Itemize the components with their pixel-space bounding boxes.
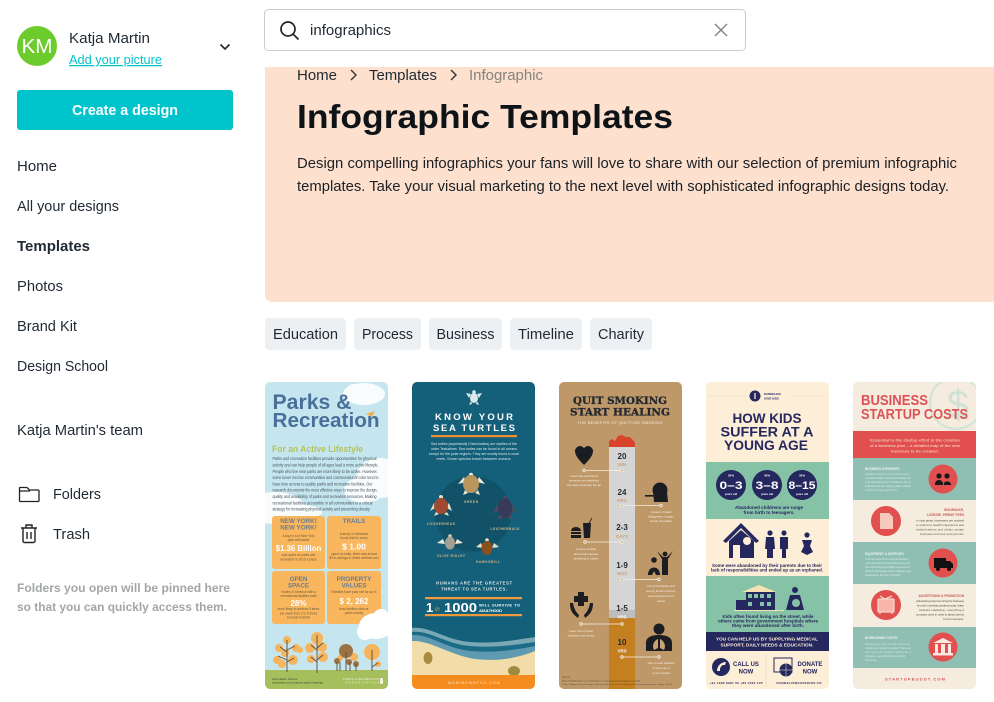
call us: +91 1008 8987 00 +89 1000 105 [710, 681, 763, 685]
section: borrowing: requires an infusion of capital. There are [865, 646, 911, 650]
folders label: Folders [53, 487, 101, 503]
logo [708, 390, 827, 402]
chip: business: Business [436, 327, 494, 343]
orphan caption: Some were abandoned by their parents due to their [712, 563, 822, 568]
green band: age groups: 8–15 [788, 480, 816, 492]
chip: education: Education [273, 327, 338, 343]
template card: quit smoking: HRS [617, 498, 627, 503]
section: business expenses: services, finance and more. [865, 488, 898, 492]
title [274, 394, 378, 427]
template card: quit smoking: YRS [617, 648, 627, 654]
icon: search [281, 22, 298, 40]
logo: DANDELION [764, 392, 781, 396]
statistic: 1 in 1000: WILL SURVIVE TO [479, 602, 520, 608]
icon: burger and drink [571, 518, 592, 538]
step captions: easier [657, 599, 665, 603]
title: START HEALING [570, 406, 670, 418]
timeline values: 10 [618, 638, 627, 647]
body copy [272, 456, 379, 512]
step captions: exercising becomes [648, 594, 675, 598]
template card: how kids suffer [706, 382, 829, 689]
icon: exercising figures [648, 551, 673, 575]
chip: business [429, 318, 502, 350]
add picture link: Add your picture [69, 53, 162, 67]
breadcrumb: Templates [369, 68, 437, 84]
chip: charity [590, 318, 652, 350]
hero description [297, 156, 957, 195]
timeline values: 24 [618, 488, 627, 497]
section: business expenses: competitors deliver a level of knowledge and [865, 476, 911, 480]
icon: bank [933, 638, 953, 656]
green band: age groups: 3–8 [756, 480, 778, 492]
section: equipment [853, 542, 976, 584]
threat statement: HUMANS ARE THE GREATEST [436, 580, 512, 586]
title: KNOW YOUR [435, 412, 513, 423]
icon: trash [21, 525, 37, 542]
green band: age groups: Abandoned childrens are range [735, 505, 804, 510]
chip: timeline [510, 318, 582, 350]
intro text [429, 442, 519, 461]
footer bar [412, 675, 535, 689]
threat statement: THREAT TO SEA TURTLES. [441, 586, 507, 592]
section: equipment: none of the equipment and listed resources [865, 561, 911, 565]
title [720, 410, 814, 453]
green band: age groups: 35% [799, 474, 805, 478]
step captions: blood circulation and [647, 584, 675, 588]
title: STARTUP COSTS [861, 406, 968, 423]
donate: DONATE [798, 662, 822, 668]
waves and beach [412, 628, 535, 675]
stat boxes: PROPERTY [337, 576, 372, 583]
turtle labels: OLIVE RIDLEY [437, 554, 466, 558]
title: Parks & [272, 391, 352, 414]
timeline values: 1-9 [616, 561, 628, 570]
subtitle: For an Active Lifestyle [272, 444, 363, 454]
section: borrowing: business; equity financing and debt [865, 654, 905, 658]
donate: DANDELIONSAVEKIDS.CO [776, 681, 822, 685]
sources: http://medlicker.com/1013/quit-smoking-what-happens-body [562, 680, 641, 682]
stat boxes: $ 2, 262 [340, 597, 369, 606]
body copy: strategy for increasing physical activity and preventing obesity. [272, 506, 371, 512]
search query: infographics [310, 23, 391, 39]
dollar watermark: $ [947, 383, 969, 427]
call us: NOW [739, 670, 754, 676]
icon: house [723, 523, 759, 558]
step captions: disappears, oxygen [648, 514, 674, 518]
chip: process [354, 318, 421, 350]
hero banner [265, 67, 994, 302]
stat boxes: $1.36 Billion [276, 544, 321, 553]
intro band [853, 431, 976, 458]
dark circle [435, 476, 511, 552]
turtle labels: GREEN [464, 500, 479, 504]
stat boxes: a breast function [287, 616, 311, 620]
navigation menu: Brand Kit [17, 319, 77, 335]
stat boxes: TRAILS [343, 518, 365, 525]
step captions: a non-smoker [652, 671, 670, 675]
title: SUFFER AT A [720, 424, 814, 440]
stat boxes: $3 in savings in direct medical cost [329, 556, 379, 560]
step captions: pressure are stabilized [569, 478, 599, 482]
section: advertising: company does in order to attract clients [916, 612, 964, 616]
stat boxes: was spent on parks and [282, 553, 316, 557]
call us [710, 658, 763, 685]
turtle labels: HAWKSBILL [476, 560, 500, 564]
section: insurance [871, 506, 964, 536]
green band: street kids: others came from government hospitals where [718, 618, 819, 624]
statistic: 1 in 1000 [425, 597, 522, 616]
body copy: recreational facilities accessible in all communities is a critical [272, 500, 373, 506]
step captions: levels normalize [650, 519, 672, 523]
statistic: 1 in 1000: 1 [426, 600, 433, 615]
step captions: diseases and stroke [568, 634, 595, 638]
hero description: Design compelling infographics your fans will love to share with our selection of premium infographic [297, 156, 957, 172]
sources [562, 676, 673, 686]
threat statement [436, 582, 512, 590]
step captions: heart rate and blood [571, 474, 598, 478]
section: business expenses: hold off realizing any of initiatives. Some [865, 480, 911, 484]
statistic: 1 in 1000: ADULTHOOD [479, 608, 502, 613]
donate: NOW [803, 670, 818, 676]
step captions: risk of heart disease [648, 661, 675, 665]
navy call-to-action band: SUPPORT, DAILY NEEDS & EDUCATION. [720, 642, 814, 648]
footer [272, 678, 323, 684]
icon: people [935, 473, 951, 485]
section: business expenses: industries indicate, paying utilities, staffing [865, 484, 911, 488]
footer url: STARTUPBUDDY.COM [885, 676, 946, 682]
section: insurance: LICENSE, PERMIT FEES [927, 513, 964, 517]
user avatar [17, 26, 57, 66]
section: business expenses [853, 458, 976, 500]
folders help text: Folders you open will be pinned here [17, 581, 230, 595]
stat boxes: parks nearby [345, 611, 364, 615]
turtle labels: LOGGERHEAD [427, 522, 456, 526]
green band: age groups: 50% [728, 474, 734, 478]
section: equipment: that will adding appropriate expenses or [865, 565, 910, 569]
section: business expenses: BUSINESS EXPENSES [865, 467, 899, 471]
green band: street kids: they were abandoned after birth. [732, 623, 804, 628]
ground [265, 670, 388, 689]
template card: business startup costs [853, 377, 982, 689]
icon: turtle logo [466, 390, 482, 405]
connector lines [580, 469, 662, 658]
icon: building [734, 585, 784, 611]
step captions: energy levels improve, [646, 589, 676, 593]
turtle: leatherback [492, 496, 518, 520]
stat boxes [272, 516, 381, 624]
footer: www.pfanr.com/mayors-parks-strategy [272, 680, 324, 684]
folders help text [17, 581, 230, 614]
orange rule [431, 435, 517, 437]
turtle: loggerhead [430, 495, 452, 516]
stat boxes: per week than 1 to 5 times [280, 612, 318, 616]
body copy: have less access to quality parks and recreation facilities. Our [272, 482, 373, 486]
step captions: breathing is easier [574, 556, 598, 560]
green band: age groups: years old [796, 492, 808, 496]
section: borrowing: financing. [865, 658, 877, 662]
statistic: 1 in 1000: in [435, 607, 440, 613]
section: advertising: ADVERTISING & PROMOTION [918, 594, 965, 598]
section: equipment: rental needs, furniture, or fixtures. [865, 573, 901, 577]
orphan caption [711, 563, 823, 572]
icon: folder [20, 488, 39, 502]
trees [273, 632, 381, 673]
navy call-to-action band [706, 632, 829, 651]
stat boxes: NEW YORK! [280, 518, 317, 525]
sources: Sources: [562, 676, 571, 678]
call us: CALL US [733, 662, 759, 668]
title: QUIT SMOKING [573, 395, 667, 407]
title [861, 392, 968, 423]
title: YOUNG AGE [724, 437, 808, 453]
beach turtles [424, 652, 432, 664]
timeline values: 1-5 [616, 604, 628, 613]
footer bar: MARINEWATCH.COM [448, 680, 500, 685]
stat boxes: A study in Nebraska [340, 532, 368, 536]
intro band: of a business plan – a detailed map of the new [870, 443, 960, 448]
section: borrowing [853, 627, 976, 668]
template card: quit smoking: MOS [617, 571, 627, 576]
timeline values: 20 [618, 452, 627, 461]
icon: chevron [220, 44, 230, 49]
navigation menu: Katja Martin's team [17, 423, 143, 439]
step captions: senses of taste [576, 547, 596, 551]
step captions: smoker's breath [650, 510, 672, 514]
footer: Information Source [272, 677, 298, 681]
navigation menu: Home [17, 159, 57, 175]
create a design button [17, 90, 233, 130]
section: insurance: to submit to health inspections and [916, 523, 964, 527]
intro text: except for the polar regions. They are mostly found in coral [429, 452, 519, 456]
sidebar [17, 26, 233, 614]
template card: quit smoking: YRS [617, 614, 627, 620]
section: advertising [871, 590, 965, 621]
cigarette ember [609, 435, 635, 447]
step captions: see step yesterday the air [567, 483, 601, 487]
template card: sea turtles [412, 382, 535, 689]
timeline values: 2-3 [616, 523, 628, 532]
navigation menu: Templates [17, 239, 90, 255]
clouds [265, 383, 388, 524]
section: borrowing: BORROWING COSTS [865, 636, 897, 640]
section: business expenses: Careful research of the industry and [865, 472, 909, 476]
body copy: quality and availability of parks and recreation resources. Making [272, 494, 377, 499]
section: insurance: business licenses and permits. [920, 532, 964, 536]
title: Recreation [272, 410, 380, 432]
section: equipment: Costs incurred for items should be listed [865, 557, 908, 561]
body copy: research documents the most effective ways to improve the design, [272, 488, 378, 492]
folders help text: so that you can quickly access them. [17, 600, 227, 614]
section: equipment: EQUIPMENT & SUPPLIES [865, 552, 904, 556]
search bar [264, 10, 746, 50]
user avatar: KM [22, 36, 52, 58]
template card: quit smoking: DAYS [616, 534, 628, 539]
section: advertising: includes marketing - everything a [919, 608, 964, 612]
chip: process: Process [362, 327, 413, 343]
statistic: 1 in 1000: 1000 [444, 600, 477, 615]
breadcrumb [297, 68, 543, 84]
stat boxes: spent on trails, there was almost [331, 552, 377, 556]
stat boxes: 28% [290, 599, 307, 608]
navigation menu [17, 159, 143, 439]
body copy: People who live near parks are more likely to be active. However, [272, 469, 378, 474]
section: insurance: In most areas, businesses are required [916, 518, 964, 522]
intro band: Essential to the startup effort is the creation [870, 438, 960, 442]
stat boxes: NEW YORK! [280, 524, 317, 532]
stat boxes: $ 1.00 [342, 542, 366, 552]
step captions: is same as of [652, 666, 670, 670]
section: advertising: Advertising and promoting the business [916, 599, 964, 603]
create a design button: Create a design [72, 103, 178, 119]
stat boxes: OPEN [290, 576, 308, 583]
icon: head with cigarette [645, 482, 668, 502]
navy call-to-action band: YOU CAN HELP US BY SUPPLYING MEDICAL [716, 636, 818, 642]
step captions: lower risk of heart [569, 629, 593, 633]
category chips [265, 318, 652, 350]
subtitle: THE BENEFITS OF QUITTING SMOKING [578, 420, 662, 425]
stat boxes: recreation in 2015 a place [280, 558, 317, 562]
breadcrumb: Home [297, 68, 337, 84]
turtle: olive ridley [437, 534, 463, 550]
template card: parks and recreation: PARKS & RECREATION [343, 677, 379, 681]
navigation menu: Photos [17, 279, 63, 295]
title: BUSINESS [861, 392, 928, 409]
stat boxes: found that for every [340, 536, 368, 540]
stat boxes: park enthusiast [288, 538, 309, 542]
green band: age groups: 0–3 [720, 480, 742, 492]
template card: parks and recreation: ORGANIZATION [345, 680, 379, 684]
user name: Katja Martin [69, 31, 150, 47]
cigarette timeline [609, 435, 635, 689]
orphan caption: lack of responsibilities and ended up as an orphaned. [711, 568, 823, 572]
green band: age groups: from birth to teenagers. [744, 510, 794, 515]
green band: age groups: years old [761, 492, 773, 496]
star [366, 411, 375, 417]
stat boxes: than families without [340, 607, 369, 611]
template card: quit smoking [559, 382, 682, 689]
icon: torso with lungs [646, 624, 672, 651]
title: SEA TURTLES [433, 423, 515, 434]
turtle: hawksbill [476, 538, 499, 555]
title: HOW KIDS [732, 410, 802, 426]
intro text: order Testudines. Sea turtles can be found in all oceans [431, 447, 517, 451]
icon: heart [575, 446, 593, 465]
stat boxes: more likely to achieve 5 times [278, 607, 320, 611]
icon: family [765, 530, 813, 558]
breadcrumb: Infographic [469, 68, 543, 84]
stat boxes: SPACE [288, 582, 309, 590]
title [570, 396, 670, 416]
turtle: green [458, 473, 485, 495]
chip: education [265, 318, 346, 350]
section: insurance: INSURANCE, [944, 508, 964, 512]
icon: cross and hands [570, 592, 593, 618]
icon: document [880, 513, 893, 529]
icon: person [786, 587, 804, 610]
timeline values [616, 452, 628, 647]
template card: parks and recreation [265, 382, 388, 689]
step captions [567, 474, 676, 675]
hero description: templates. Take your visual marketing to the next level with sophisticated infographic designs today. [297, 179, 949, 195]
section: advertising: to the business. [943, 617, 964, 621]
stat boxes: VALUES [341, 582, 367, 590]
body copy: Parks and recreation facilities provide opportunities for physical [272, 456, 377, 461]
section: insurance: authorizations and obtain certain [916, 528, 964, 532]
sources: http://www.livestrong.com/article/quit-smoking-effects-body-over-time-2013 [562, 683, 673, 686]
logo: SAVE KIDS [764, 396, 779, 400]
turtle labels [427, 500, 520, 564]
section: borrowing: Starting up one of the business [865, 642, 911, 646]
chip: charity: Charity [598, 327, 645, 343]
stat boxes: recreational facilities walk [280, 594, 317, 598]
turtle labels: LEATHERBACK [490, 527, 520, 531]
section: borrowing: two types of funded capital for a [865, 650, 911, 654]
step captions: and smell improve [574, 552, 599, 556]
section: equipment: interest costs, leasing, various software costs [865, 569, 912, 573]
page heading: Infographic Templates [297, 98, 673, 135]
stat boxes: Youths in America with a [281, 590, 316, 594]
navigation menu: All your designs [17, 199, 119, 215]
navigation menu: Design School [17, 359, 108, 375]
chip: timeline: Timeline [518, 327, 574, 343]
green band: age groups [706, 462, 829, 519]
icon: television [878, 596, 894, 614]
body copy: some lower income communities and communities of color tend to [272, 475, 379, 480]
icon: truck [934, 558, 953, 571]
trash label: Trash [53, 527, 90, 543]
stat boxes: Families have park sell for up to [332, 590, 377, 594]
intro text: Sea turtles (superfamily Chelonioidea) are reptiles of the [431, 442, 517, 446]
green band: age groups: years old [725, 492, 737, 496]
green band: age groups: 45% [764, 474, 770, 478]
icon: clear [715, 24, 727, 36]
title [433, 414, 515, 431]
section: advertising: is much more than just about costs. It also [917, 604, 964, 608]
cloud lower right [357, 609, 388, 640]
stat boxes: A day in a of New York [283, 534, 315, 538]
green band: street kids: Kids often found living on the street, while [722, 614, 814, 619]
intro text: reefs. Some species travel between oceans. [436, 457, 512, 461]
intro band: business to be created. [891, 448, 939, 454]
green band: street kids [706, 576, 829, 632]
donate [774, 658, 822, 685]
dollar watermark [930, 377, 982, 429]
turtles [430, 473, 518, 555]
template card: quit smoking: MIN [618, 462, 626, 467]
body copy: activity and can help people of all ages lead a more active lifestyle. [272, 462, 378, 468]
